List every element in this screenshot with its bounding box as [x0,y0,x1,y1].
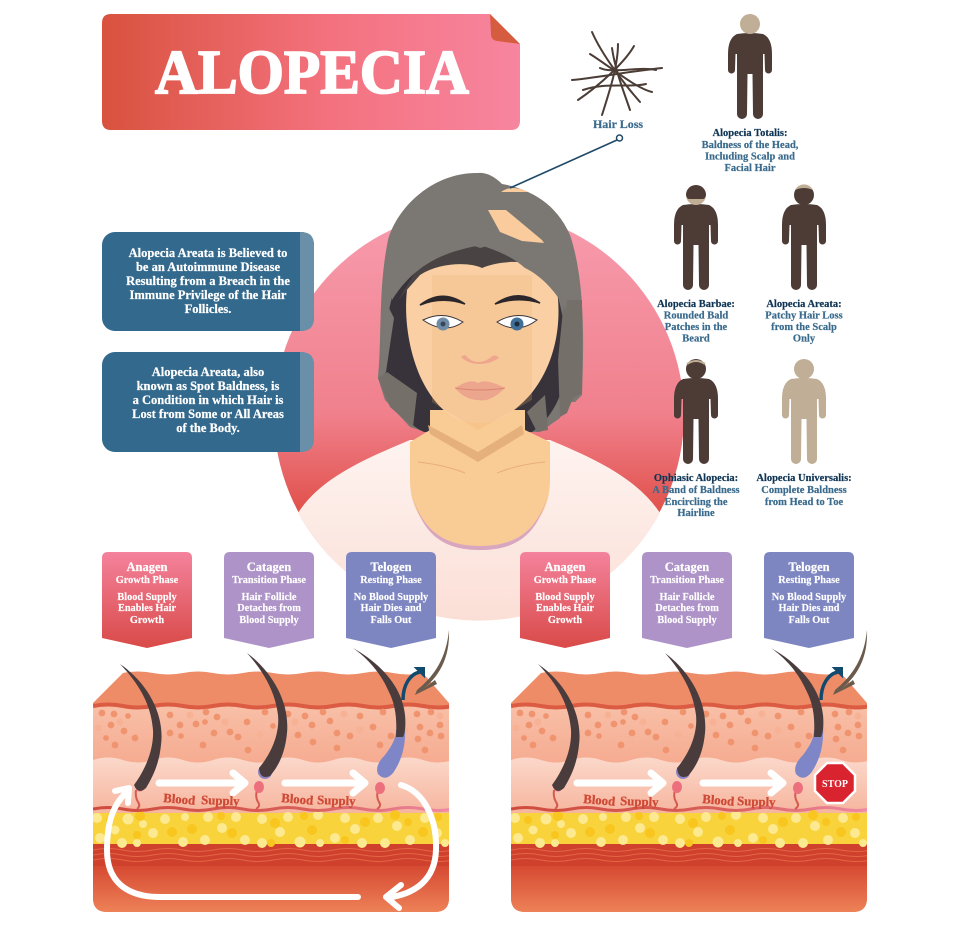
left eyebrow [420,296,465,305]
phase box: telogen left: Telogen [370,560,412,574]
phase box: catagen right: Hair Follicle [660,592,715,603]
pink circle [274,210,684,620]
phase box: telogen right: Resting Phase [778,575,840,586]
title: ALOPECIA [155,39,469,107]
phase box: catagen left: Hair Follicle [242,592,297,603]
figure: ophiasic alopecia: Ophiasic Alopecia: [654,473,738,484]
watermark tint [432,275,532,430]
phase box: catagen left: Transition Phase [232,575,306,586]
phase box: catagen left: Catagen [247,560,291,574]
blood supply labels [583,792,776,809]
phase box: anagen left: Blood Supply [117,592,177,603]
figure: alopecia universalis: Complete Baldness [761,485,847,496]
figure: ophiasic alopecia [652,359,740,519]
figure: alopecia barbae [657,185,735,344]
icon: stop sign [815,763,855,803]
phase box: anagen right: Anagen [545,560,586,574]
left eye [423,315,463,330]
panel: portrait [274,173,684,621]
bald patches [488,210,544,243]
figure: alopecia universalis [756,359,852,508]
panel: autoimmune note: Follicles. [185,302,231,316]
icon: hair loss strands [572,32,662,115]
panel: autoimmune note: Alopecia Areata is Believed to [129,246,287,260]
panel: spot baldness note: a Condition in which Hair is [133,393,284,407]
panel: spot baldness note: Alopecia Areata, also [152,365,264,379]
figure: alopecia barbae: Rounded Bald [664,310,728,322]
panel: autoimmune note: Immune Privilege of the Hair [130,288,287,302]
phase box: anagen left: Anagen [127,560,168,574]
face [406,258,559,423]
panel: autoimmune note: be an Autoimmune Disease [136,260,281,274]
figure: alopecia totalis: Facial Hair [724,163,776,174]
figure: alopecia totalis: Alopecia Totalis: [713,128,787,139]
panel: spot baldness note: Lost from Some or All Areas [132,407,284,421]
figure: alopecia barbae: Beard [682,334,710,344]
phase box: telogen left [346,552,436,648]
right eyebrow [495,296,540,304]
panel: autoimmune note: Resulting from a Breach in the [126,274,290,288]
blood supply labels: Blood [702,792,735,809]
panel: skin cross-section with stopped blood supply [510,630,871,914]
blood supply labels: Supply [317,793,356,808]
figure: ophiasic alopecia: Hairline [677,508,715,519]
phase box: anagen right [520,552,610,648]
figure: alopecia universalis: from Head to Toe [765,497,843,508]
panel: spot baldness note [102,352,314,452]
figure: alopecia totalis: Baldness of the Head, [702,140,799,151]
figure: alopecia universalis: Alopecia Universalis: [756,473,852,484]
phase box: telogen right: Telogen [788,560,830,574]
figure: ophiasic alopecia: A Band of Baldness [652,485,740,496]
phase box: catagen right: Blood Supply [657,615,717,626]
phase box: telogen right [764,552,854,648]
blood supply labels: Blood [583,792,616,809]
phase box: telogen left: No Blood Supply [354,592,429,603]
panel: autoimmune note [102,232,314,331]
phase box: anagen right: Growth Phase [534,575,597,586]
figure: ophiasic alopecia: Encircling the [664,497,728,508]
phase box: telogen right: No Blood Supply [772,592,847,603]
blood supply labels [163,791,356,808]
phase box: anagen left: Enables Hair [118,603,176,614]
phase box: catagen left: Detaches from [237,603,301,614]
figure: alopecia totalis: Including Scalp and [705,152,795,162]
panel: spot baldness note: known as Spot Baldness, is [137,379,280,393]
hair loss label: Hair Loss [593,117,643,131]
panel: spot baldness note: of the Body. [176,421,240,435]
phase box: catagen right: Detaches from [655,603,719,614]
phase box: telogen right: Hair Dies and [778,603,840,614]
phase box: telogen right: Falls Out [789,615,830,626]
phase box: catagen left: Blood Supply [239,615,299,626]
phase box: anagen left: Growth Phase [116,575,179,586]
phase box: anagen right: Blood Supply [535,592,595,603]
phase box: catagen right [642,552,732,648]
title banner [102,14,520,130]
blood supply labels: Blood [163,791,196,808]
phase box: catagen left [224,552,314,648]
blood supply labels: Supply [620,794,659,809]
right eye [497,315,537,330]
figure: alopecia areata: from the Scalp [771,322,837,333]
blood supply labels: Supply [737,794,776,809]
lips [455,381,505,400]
neck and chest [410,410,550,547]
blood supply labels: Blood [281,791,314,808]
figure: alopecia areata [765,184,843,344]
blood supply labels: Supply [201,793,240,808]
figure: alopecia areata: Patchy Hair Loss [765,310,843,322]
hair [378,173,583,432]
leader line to bald spot [510,135,622,188]
icon: stop sign: STOP [822,779,848,790]
nose [461,355,499,364]
phase box: anagen left [102,552,192,648]
phase box: telogen left: Hair Dies and [360,603,422,614]
shirt [298,440,660,621]
phase box: anagen right: Growth [548,615,582,626]
figure: alopecia areata: Alopecia Areata: [766,299,842,310]
figure: alopecia areata: Only [793,334,816,344]
phase box: catagen right: Catagen [665,560,709,574]
figure: alopecia barbae: Alopecia Barbae: [657,299,735,310]
figure: alopecia barbae: Patches in the [665,322,728,333]
phase box: telogen left: Resting Phase [360,575,422,586]
phase box: catagen right: Transition Phase [650,575,724,586]
figure: alopecia totalis [702,14,799,174]
phase box: telogen left: Falls Out [371,615,412,626]
cycle arrow [107,785,436,908]
phase box: anagen right: Enables Hair [536,603,594,614]
panel: skin cross-section with growth cycle [92,630,453,914]
phase box: anagen left: Growth [130,615,164,626]
